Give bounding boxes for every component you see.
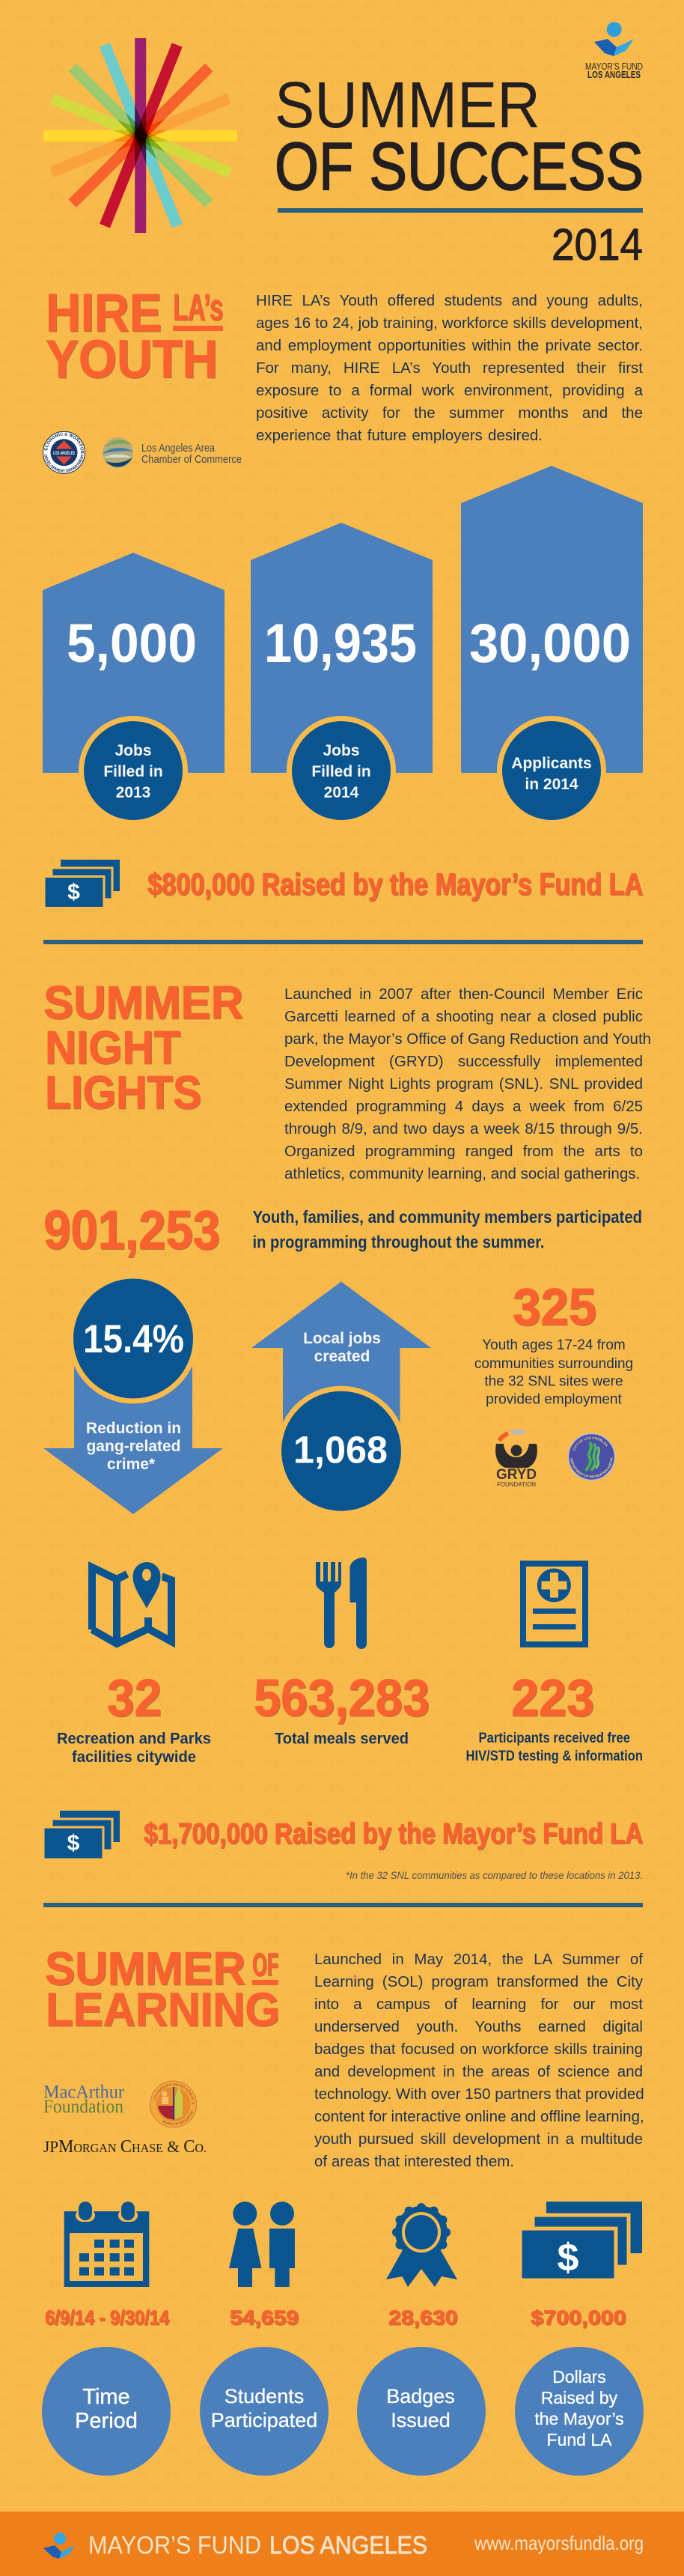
stat: 32 recreation and parks facilities [57,1668,211,1766]
bar chart: HIRE LA's Youth figures [43,466,643,825]
heading: Summer Night Lights: LIGHTS [45,1067,201,1119]
stat: 32 recreation and parks facilities: facilities citywide [72,1749,196,1766]
stat: 325 youth employed: 325 [513,1278,596,1336]
heading: HIRE LA's Youth [46,284,223,389]
text block: Summer of Learning description: Launched in May 2014, the LA Summer of [314,1951,643,1968]
bar: jobs filled in 2013 [43,553,225,825]
logo: Los Angeles Area Chamber of Commerce [103,437,242,468]
bar: jobs filled in 2014: Filled in [311,763,371,780]
heading: HIRE LA's Youth: HIRE [46,284,162,343]
stat: dollars raised: the Mayor’s [534,2409,624,2428]
title: SUMMER [275,69,540,142]
stat: 223 participants tested: HIV/STD testing & information [465,1749,643,1764]
bar: jobs filled in 2014: 2014 [324,784,359,801]
logo: City of LA Department of Recreation and Parks: CITY OF LOS ANGELES [573,1436,608,1451]
heading: Summer Night Lights [43,977,243,1119]
icon: health document [523,1564,585,1644]
logo: Los Angeles Area Chamber of Commerce: Los Angeles Area [141,443,216,455]
icon: large money stack [520,2202,642,2280]
stat: 325 youth employed [474,1278,633,1408]
stat: time period: 6/9/14 - 9/30/14 [45,2306,169,2329]
logo: LA Unified School District seal: BOARD OF EDUCATION [162,2110,193,2125]
logo: MacArthur Foundation: MacArthur [43,2082,125,2103]
arrow: 15.4% reduction in gang-related crime: crime* [107,1456,156,1473]
stat: 223 participants tested: 223 [511,1668,594,1727]
stat: dollars raised: Raised by [541,2388,618,2408]
title [275,69,644,270]
stat: 32 recreation and parks facilities: 32 [107,1668,162,1727]
text block: Summer Night Lights description: Garcetti learned of a shooting near a closed public [284,1008,643,1025]
stat: 901,253 participants: 901,253 [43,1200,220,1261]
heading: HIRE LA's Youth: YOUTH [46,330,218,389]
text block: HIRE LA's Youth description: and employment opportunities within the private sector. [256,337,643,354]
text block: Summer Night Lights description: park, the Mayor’s Office of Gang Reduction and Youth [284,1030,651,1048]
stat: students participated: Participated [211,2409,317,2431]
logo: GRYD Foundation: FOUNDATION [497,1481,536,1488]
icon: calendar [64,2202,149,2287]
stat: time period: Period [75,2409,138,2433]
text block: HIRE LA's Youth description: For many, HIRE LA’s Youth represented their first [256,359,643,377]
heading: Summer of Learning: SUMMER [45,1943,245,1995]
heading: Summer Night Lights: SUMMER [43,977,243,1029]
icon: two students [229,2202,295,2287]
stat: 901,253 participants [43,1200,642,1261]
footer band: LOS ANGELES [269,2531,427,2559]
stat: dollars raised: Dollars [552,2367,606,2387]
stat: 325 youth employed: provided employment [486,1391,623,1408]
logo: Economic and Workforce Development Department: ECONOMIC & WORKFORCE [44,433,84,454]
text block: HIRE LA's Youth description: ages 16 to 24, job training, workforce skills development, [256,315,643,332]
bar: jobs filled in 2013: 5,000 [67,613,197,674]
icon: award ribbon badge [386,2203,457,2287]
text block: Summer Night Lights description: extended programming 4 days a week from 6/25 [284,1098,643,1115]
logo: MacArthur Foundation [43,2082,125,2117]
logo: Economic and Workforce Development Department: LOS ANGELES [53,451,75,456]
logo: Economic and Workforce Development Department: DEVELOPMENT DEPARTMENT [44,454,84,472]
arrow: 1,068 local jobs created: created [314,1348,370,1365]
text block: Summer of Learning description: badges that focused on workforce skills training [314,2041,643,2058]
stat: 901,253 participants: Youth, families, and community members participated [253,1207,642,1227]
text block: Summer of Learning description: underserved youth. Youths earned digital [314,2018,643,2035]
logo: MacArthur Foundation: Foundation [43,2097,123,2117]
stat: time period: Time [82,2385,130,2409]
logo: LA Unified School District seal: LOS ANGELES UNIFIED SCHOOL DISTRICT [153,2083,195,2104]
text block: Summer Night Lights description: athletics, community learning, and social gatherings. [284,1165,640,1182]
logo: GRYD Foundation [495,1432,537,1488]
logo: Mayor's Fund top right: LOS ANGELES [587,70,641,80]
bar: jobs filled in 2014 [251,523,433,825]
logo: Mayor's Fund top right: MAYOR’S FUND [585,61,643,72]
footnote: *In the 32 SNL communities as compared to these locations in 2013. [346,1869,643,1881]
heading: HIRE LA's Youth: LA’s [173,288,223,328]
arrow: 1,068 local jobs created [251,1282,431,1516]
bar: jobs filled in 2014: Jobs [323,742,360,759]
logo: Los Angeles Area Chamber of Commerce: Chamber of Commerce [141,454,242,466]
icon: fork and knife [316,1558,367,1649]
text block: Summer of Learning description: into a campus of learning for our most [314,1996,643,2013]
heading: Summer of Learning: LEARNING [46,1984,280,2036]
bar: jobs filled in 2014: 10,935 [264,613,417,674]
text block: Summer Night Lights description: Launched in 2007 after then-Council Member Eric [284,985,643,1003]
stat: 563,283 meals served: Total meals served [275,1730,409,1748]
logo: LA Unified School District seal [150,2080,198,2128]
heading: Summer Night Lights: NIGHT [45,1022,180,1074]
stat: badges issued: Badges [386,2385,455,2408]
stat: time period [42,2306,171,2476]
stat: dollars raised: $700,000 [531,2306,626,2329]
bar: jobs filled in 2013: 2013 [116,784,150,801]
icon: rainbow starburst [43,38,237,233]
stat: 563,283 meals served: 563,283 [254,1668,430,1727]
text block: HIRE LA's Youth description: exposure to a formal work environment, providing a [256,382,643,399]
text block: Summer of Learning description [314,1951,644,2170]
text block: HIRE LA's Youth description: experience that future employers desired. [256,427,543,444]
stat: 32 recreation and parks facilities: Recreation and Parks [57,1730,211,1748]
stat: 901,253 participants: in programming throughout the summer. [253,1233,545,1252]
text block: Summer of Learning description: content for interactive online and offline learning, [314,2108,644,2125]
text block: Summer of Learning description: youth pursued skill development in a multitude [314,2130,643,2148]
icon: large money stack: $ [558,2236,579,2279]
icon: folded map with pin [92,1561,171,1644]
arrow: 15.4% reduction in gang-related crime: gang-related [86,1438,181,1455]
footer band: MAYOR’S FUND [88,2531,261,2559]
text block: Summer of Learning description: and development in the areas of science and [314,2063,643,2080]
bar: applicants in 2014: 30,000 [469,613,631,674]
stat: 325 youth employed: the 32 SNL sites were [484,1373,623,1390]
stat: 223 participants tested [465,1668,643,1764]
bar: applicants in 2014: Applicants [511,755,592,772]
bar: jobs filled in 2013: Jobs [114,742,152,759]
icon: money stack: $ [67,880,80,905]
stat: dollars raised [515,2306,644,2476]
arrow: 15.4% reduction in gang-related crime: Reduction in [86,1420,181,1437]
bar: jobs filled in 2013: Filled in [103,763,163,780]
text block: HIRE LA's Youth description [256,292,644,444]
text block: Summer of Learning description: Learning (SOL) program transformed the City [314,1973,643,1990]
logo: GRYD Foundation: GRYD [496,1467,537,1483]
text block: Summer Night Lights description: Summer Night Lights program (SNL). SNL provided [284,1075,643,1093]
arrow: 15.4% reduction in gang-related crime: 15.4% [83,1317,184,1361]
arrow: 15.4% reduction in gang-related crime [43,1273,223,1514]
stat: 325 youth employed: communities surrounding [474,1356,633,1372]
icon: money stack: $ [67,1831,80,1856]
logo: Mayor's Fund top right [585,22,643,80]
stat: 563,283 meals served [254,1668,430,1748]
stat: students participated: Students [225,2385,304,2408]
footer band: www.mayorsfundla.org [474,2532,644,2554]
title: 2014 [552,220,643,270]
arrow: 1,068 local jobs created: 1,068 [293,1429,388,1471]
stat: students participated: 54,659 [230,2306,299,2329]
icon: money stack [43,1811,120,1859]
heading: Summer of Learning: OF [252,1947,278,1983]
text block: Summer of Learning description: of areas that interested them. [314,2153,514,2170]
text block: Summer Night Lights description [284,985,651,1182]
text block: Summer Night Lights description: Organized programming ranged from the arts to [284,1143,643,1160]
bar: applicants in 2014 [461,466,643,825]
stat: students participated [200,2306,329,2476]
text block: HIRE LA's Youth description: HIRE LA’s Youth offered students and young adults, [256,292,643,309]
logo: City of LA Department of Recreation and Parks: DEPARTMENT OF RECREATION AND PARKS [570,1457,613,1478]
heading: Summer of Learning [45,1943,280,2036]
arrow: 1,068 local jobs created: Local jobs [303,1330,381,1347]
bar: applicants in 2014: in 2014 [525,776,578,793]
logo: City of LA Department of Recreation and Parks [567,1433,615,1481]
text block: Summer Night Lights description: Development (GRYD) successfully implemented [284,1053,643,1070]
text block: Summer Night Lights description: through 8/9, and two days a week 8/15 through 9/5. [284,1120,643,1137]
stat: 325 youth employed: Youth ages 17-24 from [482,1337,626,1353]
stat: badges issued: 28,630 [388,2306,458,2329]
stat: badges issued: Issued [391,2409,451,2431]
logo: Economic and Workforce Development Department [43,431,85,474]
logo: JPMorgan Chase & Co.: JPMORGAN CHASE & CO. [43,2137,207,2157]
footer band [0,2512,684,2576]
icon: money stack [44,860,120,908]
text block: HIRE LA's Youth description: positive activity for the summer months and the [256,404,643,422]
stat: 223 participants tested: Participants received free [479,1731,630,1746]
logo: Mayor's Fund footer [43,2533,75,2559]
text block: Summer of Learning description: technology. With over 150 partners that provided [314,2086,644,2103]
stat: badges issued [357,2306,486,2476]
stat: dollars raised: Fund LA [547,2430,612,2449]
